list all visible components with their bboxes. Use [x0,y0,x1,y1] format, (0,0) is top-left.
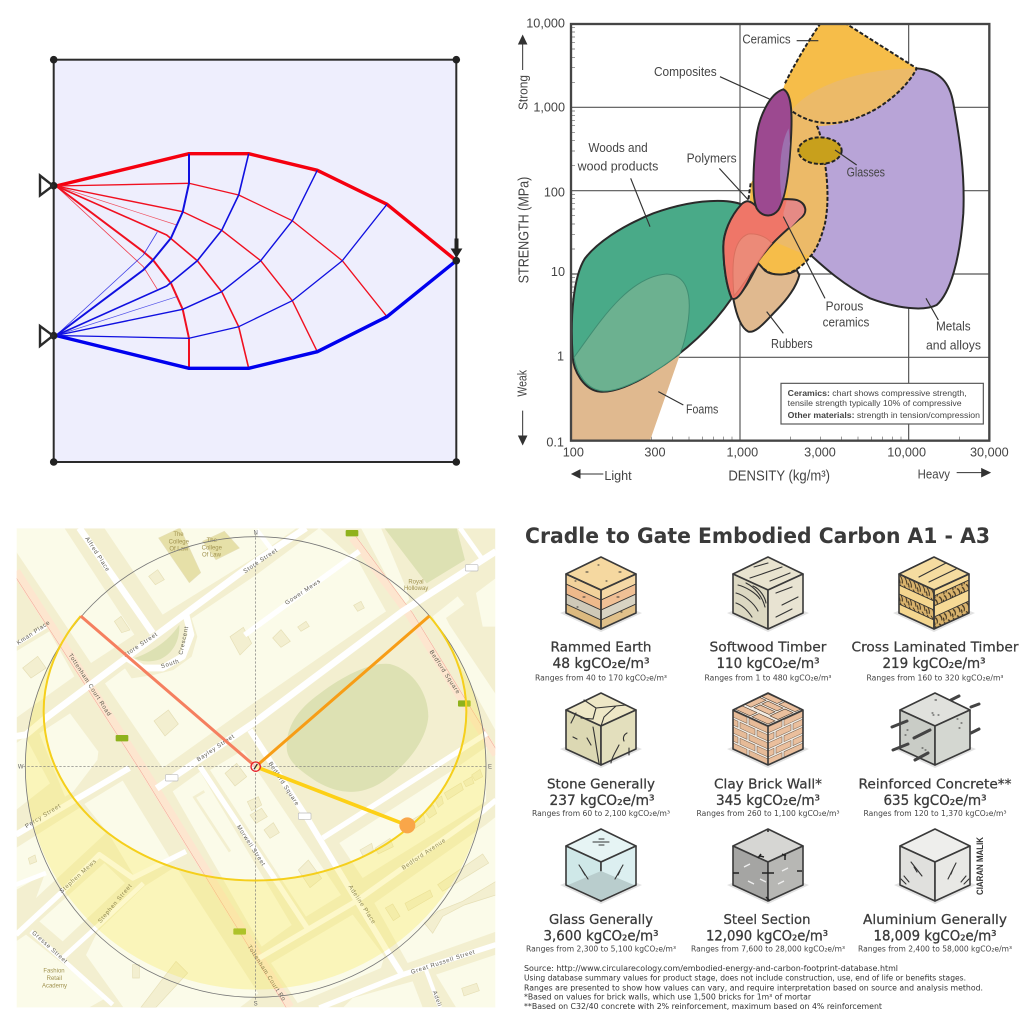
legend box [781,383,983,424]
design domain square [54,60,456,462]
x axis numbers: 300 [644,446,666,460]
region labels: and alloys [926,338,981,352]
sun path arc [44,616,466,881]
label: rammed earth: 48 kgCO₂e/m³ [552,656,650,672]
icon: clay brick cube [727,693,809,768]
strong label and arrow [516,36,530,110]
label: steel: Steel Section [724,913,810,928]
bounding sun circle [25,537,486,997]
label: softwood timber: Ranges from 1 to 480 kgCO₂e/m³ [704,674,832,683]
road labels: Store Street [243,548,279,575]
region labels: Glasses [847,166,885,180]
legend box: Other materials: strength in tension/compression [788,410,980,420]
compass letters: S [254,1001,258,1007]
icon: softwood timber cube [727,557,809,632]
sun position [399,817,415,833]
label: reinforced concrete: Ranges from 120 to 1,370 kgCO₂e/m³ [864,809,1006,818]
shaded sun area [25,616,486,990]
foams region [572,353,681,441]
road labels: Adeline Place [347,884,376,926]
frame nodes [50,56,460,466]
heavy label and arrow: Heavy [918,467,951,481]
road labels: Retail [47,976,62,982]
compass crosshair [23,533,487,1000]
road labels: Store Street [123,632,159,659]
axis minor ticks [571,28,959,441]
icon: lower pin support [40,326,53,346]
icon: steel cube [727,829,809,904]
icon: glass cube [560,829,642,904]
road labels: Tottenham Court Road [67,653,112,718]
title: Cradle to Gate Embodied Carbon A1 - A3 [525,524,990,548]
item: aluminium [858,829,1012,954]
panel: strut and tie truss diagram [40,56,462,466]
label: cross laminated timber: Cross Laminated Timber [852,641,1019,656]
road labels: Alfred Place [83,536,110,573]
map and sun path [13,528,497,1009]
road number badges [116,530,478,935]
item: rammed earth [535,557,667,683]
source notes: Using database summary values for product stage, does not include construction, use, end of life or benefits stages. [524,974,966,983]
item: steel [691,829,845,954]
map base [17,528,495,1007]
road labels: Percy Street [25,803,62,830]
label: glass [526,913,676,954]
x axis numbers: 3,000 [804,446,836,460]
road labels: Stephen Mews [59,859,98,895]
light label and arrow [572,469,632,483]
item: stone [532,693,670,818]
road labels: Holloway [404,586,428,592]
region labels: Polymers [687,152,737,166]
item: reinforced concrete [858,693,1012,818]
label: stone: Stone Generally [547,778,655,793]
current sun line [256,767,407,825]
label: clay brick [696,778,840,818]
label: steel: 12,090 kgCO₂e/m³ [706,929,828,945]
road labels: College [169,539,190,545]
weak label and arrow [516,369,530,444]
glasses region [798,137,842,164]
chart frame [571,24,989,441]
road labels: Stephen Street [98,883,134,925]
label: clay brick: Clay Brick Wall* [714,778,823,793]
label: glass: 3,600 kgCO₂e/m³ [544,929,658,945]
label: steel: Ranges from 7,600 to 28,000 kgCO₂e/m³ [691,945,845,954]
pink main roads [13,537,497,1009]
heavy label and arrow [918,467,990,481]
region labels: Woods and [588,141,648,155]
weak label and arrow: Weak [516,369,530,397]
item: glass [526,829,676,954]
label: rammed earth: Ranges from 40 to 170 kgCO₂e/m³ [535,674,667,683]
icon: stone cube [560,693,642,768]
road labels: The [207,538,218,544]
author credit: CIARAN MALIK [975,837,985,895]
x axis title: DENSITY (kg/m³) [728,469,830,485]
region labels: Porous [826,300,863,314]
blue tension curves [56,154,456,368]
y axis numbers: 1 [557,350,564,364]
road labels: Academy [42,984,67,990]
source notes [524,964,983,1011]
x axis numbers: 10,000 [887,446,926,460]
icon: upper pin support [40,176,53,196]
location marker [251,762,260,771]
label: steel [691,913,845,954]
road labels: Fashion [43,968,65,974]
label: aluminium: Aluminium Generally [863,913,1007,928]
item: softwood timber [704,557,832,683]
white roads [16,528,496,1008]
ceramics region [750,24,917,275]
x axis numbers: 1,000 [726,446,758,460]
label: softwood timber [704,641,832,683]
road labels: South [160,659,180,670]
grid lines [571,24,989,441]
road labels: Morwell Street [235,824,266,868]
source notes: **Based on C32/40 concrete with 2% reinforcement, maximum based on 4% reinforcement [524,1002,882,1011]
ceramics and metals overlap [770,68,917,257]
woods region [572,201,742,392]
label: aluminium [858,913,1012,954]
label: rammed earth: Rammed Earth [550,641,652,656]
rubbers region [733,263,799,332]
road labels: Of Law [169,547,189,553]
y axis numbers: 10,000 [526,16,565,30]
small buildings [23,528,496,1007]
region labels: wood products [577,160,658,174]
label: rammed earth [535,641,667,683]
x axis numbers: 100 [563,446,584,460]
label: aluminium: Ranges from 2,400 to 58,000 kgCO₂e/m³ [858,945,1012,954]
road labels: Adeli [431,990,442,1008]
region labels: Metals [936,320,971,334]
y axis numbers: 0.1 [546,436,564,450]
y axis title: STRENGTH (MPa) [516,177,532,283]
panel: sun path map [13,528,497,1009]
label: reinforced concrete: 635 kgCO₂e/m³ [884,793,986,809]
polymers overlaps [733,234,772,296]
road labels: Bayley Street [196,734,236,763]
label: glass: Glass Generally [549,913,653,928]
y axis numbers: 1,000 [533,101,565,115]
region labels [577,32,981,416]
x axis numbers [563,446,1009,460]
y axis numbers: 100 [544,186,565,200]
region labels: Composites [654,65,717,79]
green open spaces [134,528,465,792]
woods and foams overlap [574,274,689,391]
compass letters: N [254,530,258,536]
region labels: ceramics [823,316,869,330]
cream city blocks [16,528,496,1007]
source notes: Ranges are presented to show how values can vary, and require interpretation based on source and analysis method. [524,983,983,992]
legend box: tensile strength typically 10% of compressive [788,398,962,408]
label: softwood timber: Softwood Timber [710,641,827,656]
road labels: The [173,532,184,538]
panel: embodied carbon [524,524,1019,1011]
composites and metals overlap [780,128,790,199]
road labels: College [202,545,223,551]
icon: aluminium cube [894,829,976,904]
arrow: downward load [452,239,462,257]
item: clay brick [696,693,840,818]
polymers region [723,199,805,299]
leader lines [631,41,938,405]
label: aluminium: 18,009 kgCO₂e/m³ [874,929,996,945]
label: clay brick: 345 kgCO₂e/m³ [716,793,820,809]
panel: strength vs density chart [516,16,1009,485]
label: reinforced concrete: Reinforced Concrete** [858,778,1012,793]
y axis numbers [526,16,565,450]
label: glass: Ranges from 2,300 to 5,100 kgCO₂e/m³ [526,945,676,954]
region labels: Foams [686,402,718,416]
strong label and arrow: Strong [516,75,530,110]
icon: rammed earth cube [560,557,642,632]
compass letters: E [488,765,492,771]
x axis numbers: 30,000 [970,446,1009,460]
legend box: Ceramics: chart shows compressive strength, [788,388,967,398]
red compression curves [56,154,456,368]
label: cross laminated timber: 219 kgCO₂e/m³ [882,656,986,672]
road labels: Tottenham Court Ro [246,944,286,1003]
label: cross laminated timber: Ranges from 160 to 320 kgCO₂e/m³ [866,674,1004,683]
road labels: Bedford Square [428,649,461,696]
road labels: Gresse Street [30,930,68,965]
sunset line [256,616,429,767]
label: stone: 237 kgCO₂e/m³ [550,793,654,809]
item: cross laminated timber [852,557,1019,683]
road labels: Royal [408,579,424,585]
composites region [753,89,792,215]
metals and alloys region [793,68,964,308]
road labels: Great Russell Street [410,949,476,976]
chart body [516,16,1009,485]
region labels: Rubbers [771,337,813,351]
road labels: Bedford Square [267,761,300,807]
region labels: Ceramics [742,32,791,46]
source notes: Source: http://www.circularecology.com/embodied-energy-and-carbon-footprint-database.html [524,964,898,973]
compass letters: W [18,765,24,771]
road labels: Of Law [202,553,222,559]
sunrise line [81,616,256,767]
inner lane outline [194,791,230,852]
label: softwood timber: 110 kgCO₂e/m³ [716,656,820,672]
road labels: Gower Mews [284,578,322,607]
source notes: *Based on values for brick walls, which use 1,500 bricks for 1m³ of mortar [524,992,812,1002]
label: cross laminated timber [852,641,1019,683]
icon: reinforced concrete cube [892,693,979,768]
road labels: Crescent [178,626,190,655]
road labels [16,532,476,1008]
label: reinforced concrete [858,778,1012,818]
polymers and ceramics overlap [783,201,804,228]
compass letters [18,530,492,1007]
y axis numbers: 10 [551,265,565,279]
label: stone: Ranges from 60 to 2,100 kgCO₂e/m³ [532,809,670,818]
label: clay brick: Ranges from 260 to 1,100 kgCO₂e/m³ [696,809,840,818]
light label and arrow: Light [604,469,632,483]
road labels: Kman Place [16,620,52,647]
ceramics dashed outline [748,24,917,275]
icon: cross laminated timber cube [893,557,975,632]
road labels: Bedford Avenue [401,838,447,872]
label: stone [532,778,670,818]
